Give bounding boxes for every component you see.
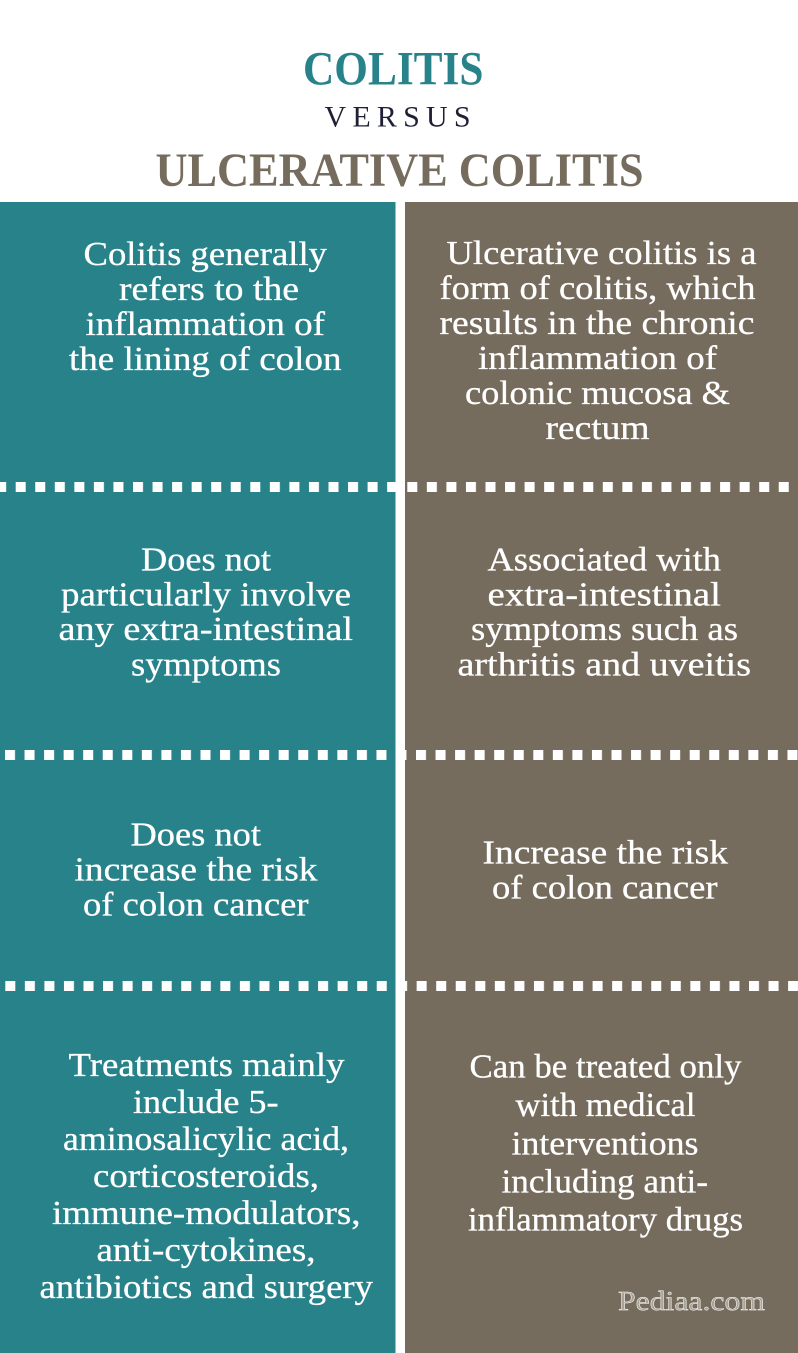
text block: colitis treatments: Treatments mainly: [68, 1047, 344, 1084]
text block: ulcerative colitis cancer risk: Increase the risk: [482, 834, 728, 872]
text block: ulcerative colitis definition: colonic mucosa &: [465, 375, 730, 412]
text block: ulcerative colitis cancer risk: of colon cancer: [492, 870, 718, 906]
text block: colitis treatments: anti-cytokines,: [96, 1232, 316, 1269]
text block: colitis treatments: include 5-: [133, 1084, 278, 1121]
text block: ulcerative colitis definition: Ulcerative colitis is a: [446, 235, 756, 272]
text block: ulcerative colitis definition: [440, 235, 756, 447]
text block: colitis cancer risk: [74, 816, 318, 924]
text block: colitis symptoms: symptoms: [131, 646, 281, 684]
text block: ulcerative colitis symptoms: extra-intestinal: [488, 576, 721, 614]
subtitle: versus: VERSUS: [324, 100, 470, 134]
text block: colitis symptoms: particularly involve: [61, 576, 351, 614]
text block: ulcerative colitis treatments: [468, 1048, 743, 1238]
text block: ulcerative colitis definition: inflammation of: [478, 340, 718, 377]
text block: colitis treatments: corticosteroids,: [93, 1158, 319, 1195]
panel: ulcerative colitis column background: [405, 202, 798, 1353]
text block: colitis cancer risk: of colon cancer: [83, 886, 309, 924]
text block: colitis cancer risk: increase the risk: [74, 852, 318, 888]
text block: colitis definition: refers to the: [119, 271, 299, 308]
watermark: Pediaa.com: Pediaa.com: [618, 1286, 765, 1316]
text block: ulcerative colitis treatments: including anti-: [502, 1164, 708, 1200]
text block: ulcerative colitis treatments: Can be treated only: [470, 1048, 742, 1086]
text block: ulcerative colitis treatments: inflammatory drugs: [468, 1202, 743, 1238]
text block: colitis definition: the lining of colon: [69, 341, 342, 378]
text block: colitis symptoms: Does not: [141, 542, 272, 578]
text block: ulcerative colitis symptoms: symptoms such as: [471, 611, 738, 648]
text block: colitis symptoms: [58, 542, 353, 684]
text block: ulcerative colitis symptoms: arthritis and uveitis: [458, 646, 751, 684]
text block: ulcerative colitis symptoms: [458, 542, 751, 684]
text block: colitis treatments: immune-modulators,: [52, 1195, 360, 1232]
text block: colitis definition: [69, 236, 342, 378]
text block: ulcerative colitis definition: rectum: [546, 410, 650, 447]
text block: ulcerative colitis definition: results in the chronic: [440, 305, 754, 342]
text block: colitis treatments: aminosalicylic acid,: [63, 1121, 349, 1158]
text block: ulcerative colitis definition: form of colitis, which: [440, 270, 756, 307]
panel: colitis column background: [0, 202, 396, 1353]
text block: colitis treatments: antibiotics and surgery: [40, 1269, 373, 1306]
text block: ulcerative colitis cancer risk: [482, 834, 728, 906]
text block: ulcerative colitis treatments: interventions: [512, 1126, 698, 1162]
text block: colitis symptoms: any extra-intestinal: [58, 611, 353, 648]
text block: colitis definition: inflammation of: [86, 306, 326, 343]
text block: ulcerative colitis treatments: with medical: [516, 1087, 696, 1124]
text block: colitis cancer risk: Does not: [130, 816, 262, 854]
text block: colitis definition: Colitis generally: [84, 236, 327, 273]
text block: ulcerative colitis symptoms: Associated with: [488, 542, 721, 578]
title: Colitis: COLITIS: [303, 42, 484, 96]
title: Ulcerative Colitis: ULCERATIVE COLITIS: [156, 144, 644, 197]
text block: colitis treatments: [40, 1047, 373, 1306]
